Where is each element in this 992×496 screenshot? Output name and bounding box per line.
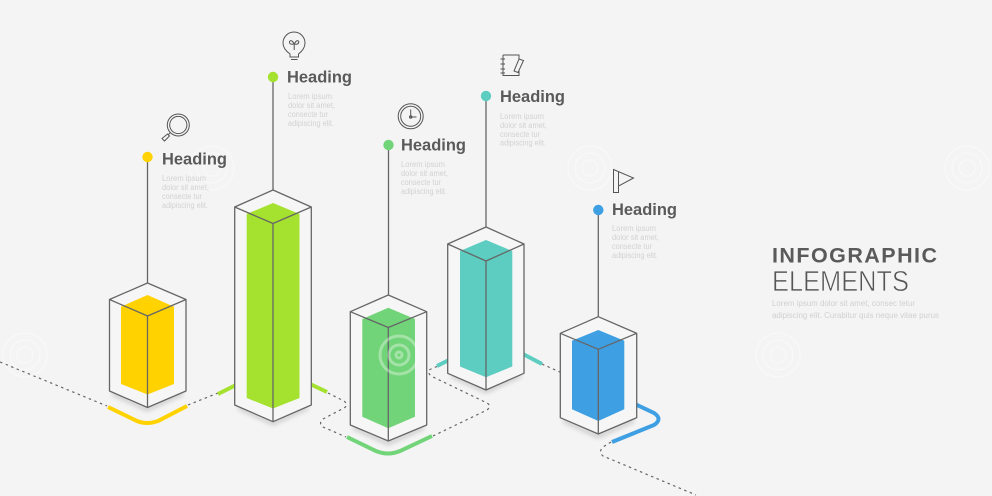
heading block 2: dolor sit amet, (288, 101, 335, 110)
bar 4: teal (448, 227, 524, 393)
heading block 4: consecte tur (500, 130, 540, 139)
bar 2: lime (235, 190, 311, 425)
heading block 5: Lorem ipsum (612, 224, 656, 233)
heading block 1: consecte tur (162, 192, 202, 201)
title: INFOGRAPHIC (772, 243, 937, 267)
heading block 2: Lorem ipsum (288, 92, 332, 101)
watermark spiral over green bar (380, 336, 418, 374)
heading block 2 (287, 68, 352, 128)
heading block 2: consecte tur (288, 110, 328, 119)
watermark spirals (3, 146, 989, 377)
marker stem and dot 3 (383, 140, 394, 295)
heading block 5: consecte tur (612, 242, 652, 251)
heading block 3: Heading (401, 136, 466, 154)
connector path: dotted route (0, 362, 696, 495)
title (772, 243, 937, 298)
icon: flag (614, 170, 634, 192)
icon: light bulb (283, 32, 305, 60)
heading block 3 (401, 136, 466, 196)
heading block 1: Heading (162, 150, 227, 168)
heading block 4 (500, 88, 565, 148)
heading block 5: Heading (612, 201, 677, 219)
heading block 4: Lorem ipsum (500, 112, 544, 121)
heading block 3: consecte tur (401, 178, 441, 187)
heading block 4: Heading (500, 88, 565, 106)
heading block 4: dolor sit amet, (500, 121, 547, 130)
heading block 4: adipiscing elit. (500, 138, 546, 148)
heading block 1: adipiscing elit. (162, 201, 208, 210)
connector: coloured segments (108, 354, 658, 454)
bar 3: green (350, 295, 427, 445)
heading block 3: adipiscing elit. (401, 187, 447, 196)
icon: clock (398, 104, 423, 129)
heading block 5: adipiscing elit. (612, 251, 658, 260)
marker stem and dot 4 (481, 91, 491, 227)
heading block 5: dolor sit amet, (612, 233, 659, 242)
title: ELEMENTS (772, 266, 909, 298)
heading block 3: Lorem ipsum (401, 160, 445, 169)
heading block 2: adipiscing elit. (288, 119, 334, 128)
heading block 5 (612, 201, 677, 260)
marker stem and dot 5 (593, 205, 604, 317)
icon: magnifier (162, 114, 189, 141)
heading block 1 (162, 150, 227, 210)
heading block 3: dolor sit amet, (401, 169, 448, 178)
heading block 2: Heading (287, 68, 352, 86)
heading block 1: dolor sit amet, (162, 183, 209, 192)
bar 1: yellow (110, 283, 186, 411)
heading block 1: Lorem ipsum (162, 174, 206, 183)
bar 5: blue (560, 317, 637, 438)
icon: notebook and pencil (500, 55, 524, 76)
subtitle text: Lorem ipsum dolor sit amet, consec tetur (772, 299, 915, 308)
marker stem and dot 2 (268, 72, 278, 190)
marker stem and dot 1 (142, 152, 153, 283)
subtitle text (772, 299, 939, 320)
subtitle text: adipiscing elit. Curabitur quis neque vitae purus (772, 311, 939, 320)
